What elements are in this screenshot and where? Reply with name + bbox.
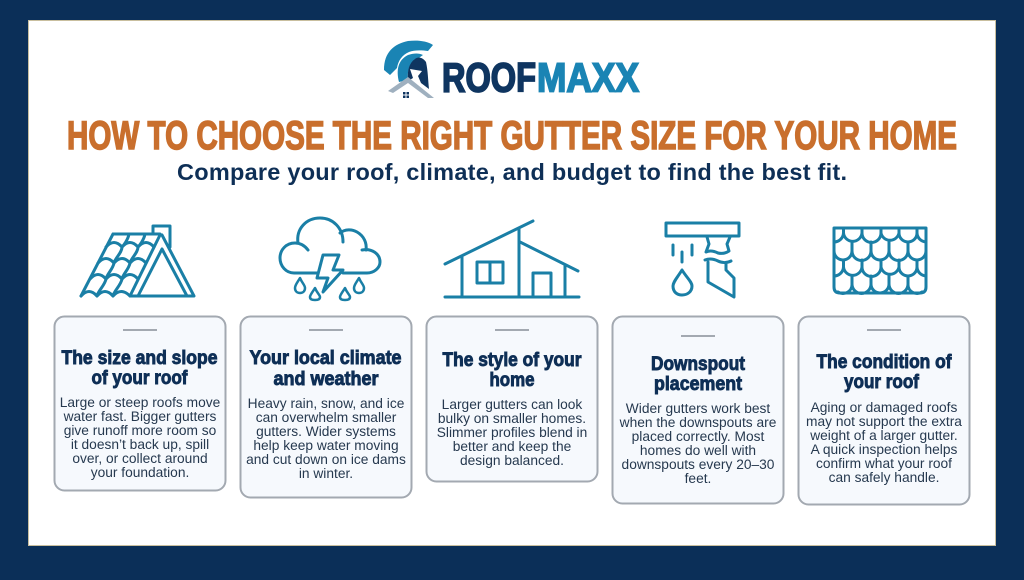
text block: Larger gutters can look [442,397,582,412]
text block: Aging or damaged roofs [811,400,958,415]
heading: The size and slope [62,347,218,369]
heading: and weather [274,368,379,390]
text block: it doesn’t back up, spill [71,437,209,452]
subtitle: Compare your roof, climate, and budget to find the best fit. [177,159,847,185]
panel: style of home [426,316,598,482]
text block: and cut down on ice dams [246,452,406,467]
heading: home [490,369,535,391]
icon: gutter and downspout [666,223,739,297]
text block: can safely handle. [829,470,939,485]
heading: The style of your [442,349,582,371]
heading [250,347,402,390]
logo: Roof Maxx [384,41,639,100]
text block: your foundation. [91,465,189,480]
text block: Slimmer profiles blend in [437,425,587,440]
heading [62,347,218,389]
text block: may not support the extra [806,414,962,429]
text block [437,397,587,468]
text block: Large or steep roofs move [60,395,221,410]
heading: Downspout [651,353,745,375]
panel: climate and weather [240,316,412,498]
text block: weight of a larger gutter. [809,428,958,443]
text block [246,396,406,481]
text block [60,395,221,480]
icon: storm cloud [280,218,380,300]
text block: help keep water moving [253,438,399,453]
text block: Wider gutters work best [626,401,770,416]
text block: can overwhelm smaller [256,410,397,425]
text block: bulky on smaller homes. [438,411,586,426]
heading [651,353,745,395]
heading: Your local climate [250,347,402,369]
heading: your roof [844,371,919,393]
text block: homes do well with [640,443,756,458]
heading [816,351,952,393]
text block: when the downspouts are [619,415,777,430]
text block: downspouts every 20–30 [622,457,775,472]
text block [619,401,777,486]
text block: confirm what your roof [816,456,952,471]
text block: in winter. [299,466,353,481]
text block: placed correctly. Most [632,429,765,444]
icon: tiled roof [81,226,194,296]
icon: house [445,221,579,297]
heading [442,349,582,391]
icon: roof shingles [834,228,926,294]
text block: better and keep the [453,439,572,454]
panel: roof condition [798,316,970,504]
panel: roof size and slope [54,316,226,490]
text block [806,400,962,485]
text block: gutters. Wider systems [256,424,396,439]
logo: Roof Maxx: MAXX [537,54,639,100]
text block: water fast. Bigger gutters [63,409,217,424]
text block: A quick inspection helps [811,442,958,457]
heading: placement [654,373,742,395]
panel: downspout placement [612,316,784,504]
text block: feet. [685,471,711,486]
text block: design balanced. [460,453,564,468]
heading: of your roof [92,367,188,389]
wordmark: ROOF [442,54,536,100]
icon: spartan helmet over roof [384,41,434,98]
text block: over, or collect around [72,451,208,466]
heading: The condition of [816,351,952,373]
text block: Heavy rain, snow, and ice [248,396,405,411]
text block: give runoff more room so [64,423,217,438]
